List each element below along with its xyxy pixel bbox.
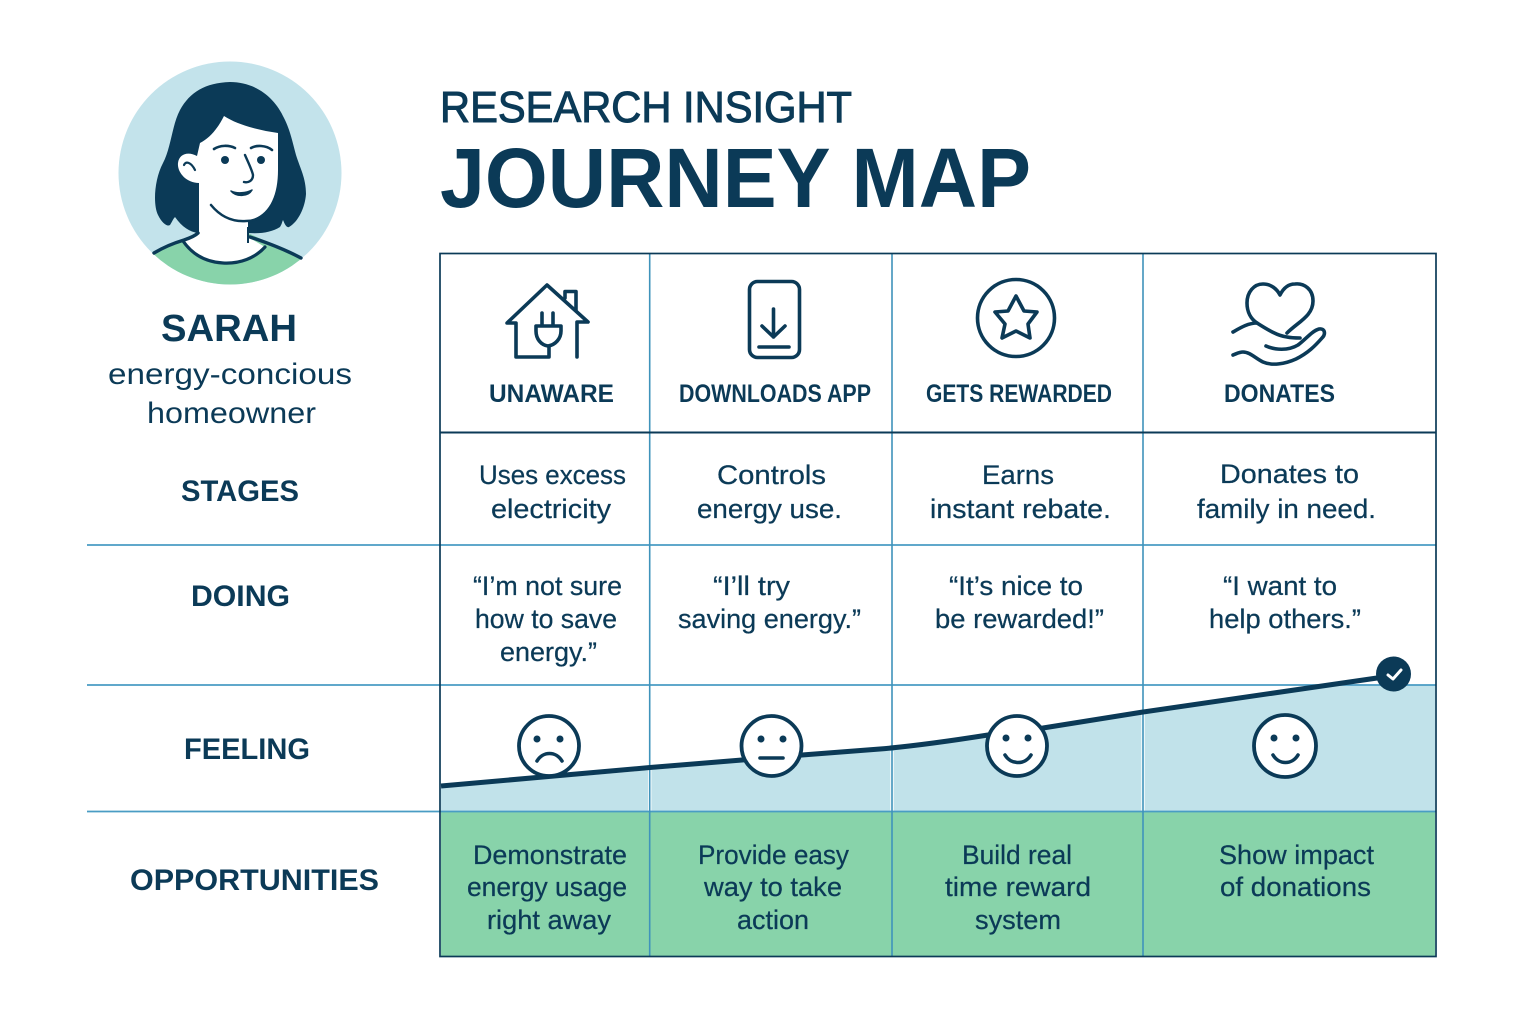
- quote: downloads app: “I’ll try: [713, 571, 791, 601]
- stage action: unaware: [479, 460, 626, 524]
- icon: check end marker: [1376, 656, 1411, 692]
- quote: downloads app: saving energy.”: [678, 604, 861, 634]
- persona name: SARAH: [161, 308, 297, 350]
- quote: unaware: [473, 571, 622, 667]
- title: JOURNEY MAP: [440, 131, 1031, 225]
- quote: gets rewarded: “It’s nice to: [949, 571, 1083, 601]
- persona description: [108, 358, 352, 430]
- opportunity: downloads app: action: [737, 905, 809, 935]
- quote: gets rewarded: be rewarded!”: [935, 604, 1104, 634]
- opportunities row background: [441, 812, 1435, 956]
- stage action: downloads app: [697, 460, 842, 524]
- row label: opportunities: OPPORTUNITIES: [130, 864, 379, 897]
- stage action: downloads app: Controls: [717, 460, 826, 490]
- row label: doing: DOING: [191, 580, 290, 613]
- quote: donates: “I want to: [1223, 571, 1337, 601]
- stage heading: unaware: UNAWARE: [489, 380, 614, 408]
- quote: donates: help others.”: [1209, 604, 1361, 634]
- quote: gets rewarded: [935, 571, 1104, 634]
- stage action: unaware: electricity: [491, 494, 612, 524]
- persona description: homeowner: [147, 397, 316, 430]
- icon: sad face: [519, 716, 579, 776]
- opportunity: donates: of donations: [1220, 872, 1371, 902]
- opportunity: unaware: Demonstrate: [473, 840, 627, 870]
- opportunity: gets rewarded: system: [975, 905, 1061, 935]
- icon: neutral face: [742, 716, 802, 776]
- stage action: donates: Donates to: [1220, 459, 1359, 489]
- opportunity: downloads app: way to take: [703, 872, 842, 902]
- opportunity: gets rewarded: [945, 840, 1091, 935]
- icon: house with plug: [507, 285, 588, 357]
- stage action: gets rewarded: [930, 460, 1111, 524]
- stage action: gets rewarded: instant rebate.: [930, 494, 1111, 524]
- stage heading: gets rewarded: GETS REWARDED: [926, 380, 1112, 408]
- icon: happy face: [987, 716, 1047, 776]
- opportunity: downloads app: Provide easy: [698, 840, 849, 870]
- quote: downloads app: [678, 571, 861, 634]
- opportunity: unaware: right away: [487, 905, 611, 935]
- row label: stages: STAGES: [181, 475, 299, 508]
- feeling line: [441, 674, 1393, 786]
- quote: donates: [1209, 571, 1361, 634]
- feeling chart area: [441, 685, 1435, 811]
- icon: star badge: [978, 280, 1054, 356]
- opportunity: downloads app: [698, 840, 849, 935]
- stage action: downloads app: energy use.: [697, 494, 842, 524]
- stage action: donates: family in need.: [1197, 494, 1376, 524]
- opportunity: gets rewarded: time reward: [945, 872, 1091, 902]
- opportunity: unaware: [467, 840, 627, 935]
- icon: very happy face: [1254, 715, 1316, 777]
- table grid: [87, 253, 1436, 957]
- portrait: Sarah avatar: [118, 62, 342, 290]
- stage action: unaware: Uses excess: [479, 460, 626, 490]
- icon: phone with download arrow: [750, 282, 800, 358]
- row label: feeling: FEELING: [184, 733, 310, 766]
- icon: heart in hand: [1233, 284, 1324, 364]
- opportunity: unaware: energy usage: [467, 872, 627, 902]
- stage heading: downloads app: DOWNLOADS APP: [679, 380, 871, 408]
- stage action: donates: [1197, 459, 1376, 524]
- persona description: energy-concious: [108, 358, 352, 391]
- opportunity: donates: Show impact: [1219, 840, 1374, 870]
- quote: unaware: “I’m not sure: [473, 571, 622, 601]
- quote: unaware: energy.”: [500, 637, 597, 667]
- title: [440, 83, 1031, 225]
- stage heading: donates: DONATES: [1224, 380, 1335, 408]
- quote: unaware: how to save: [475, 604, 617, 634]
- opportunity: donates: [1219, 840, 1374, 902]
- stage action: gets rewarded: Earns: [982, 460, 1054, 490]
- title: RESEARCH INSIGHT: [440, 83, 852, 132]
- opportunity: gets rewarded: Build real: [962, 840, 1072, 870]
